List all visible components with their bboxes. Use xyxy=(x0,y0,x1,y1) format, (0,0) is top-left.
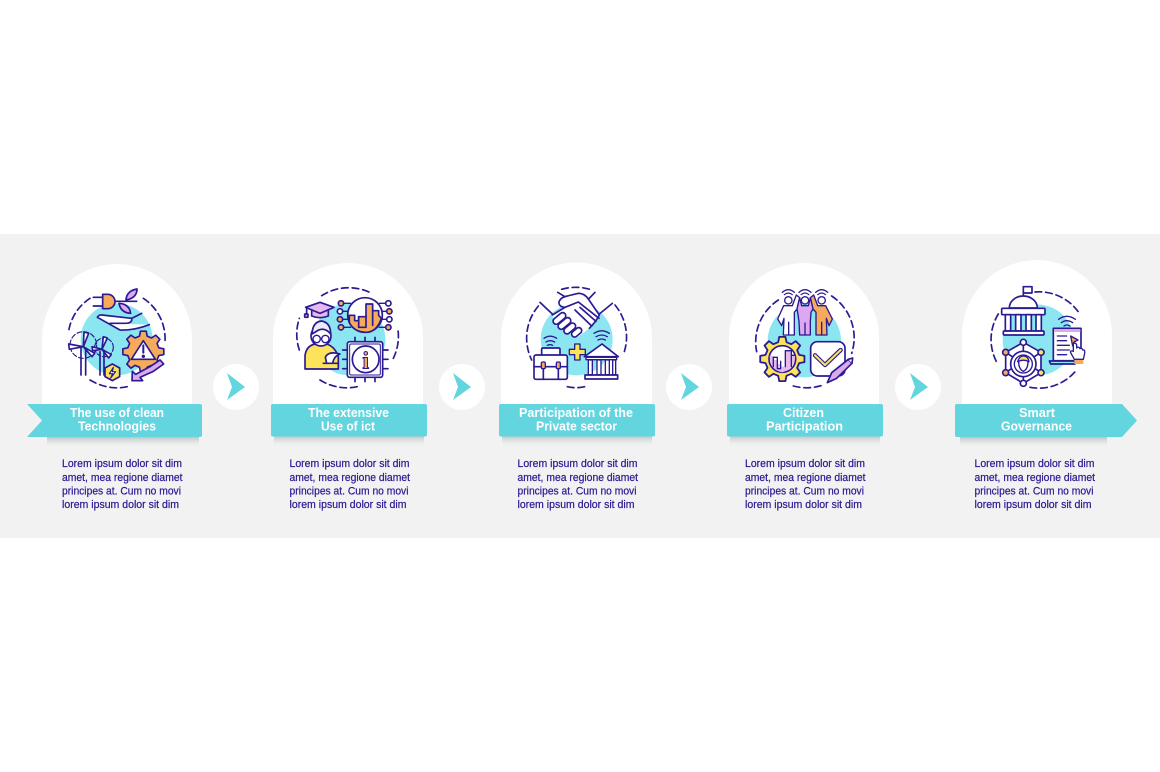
body text xyxy=(62,458,182,511)
body text: Lorem ipsum dolor sit dim xyxy=(62,458,182,470)
body text: lorem ipsum dolor sit dim xyxy=(974,499,1092,511)
body text xyxy=(745,458,866,511)
ribbon shadow xyxy=(47,437,199,448)
heading: The extensive xyxy=(308,406,389,420)
body text: lorem ipsum dolor sit dim xyxy=(290,499,406,511)
ribbon shadow xyxy=(730,436,880,447)
icon: citizens xyxy=(756,290,854,388)
body text: Lorem ipsum dolor sit dim xyxy=(745,458,865,470)
body text: amet, mea regione diamet xyxy=(745,472,866,484)
step 1: clean technologies xyxy=(27,264,202,511)
ribbon xyxy=(27,404,202,437)
body text: principes at. Cum no movi xyxy=(290,486,408,498)
ribbon shadow xyxy=(960,437,1107,448)
heading: Participation of the xyxy=(519,406,633,420)
body text: lorem ipsum dolor sit dim xyxy=(62,499,179,511)
arch panel xyxy=(42,264,192,404)
icon: ICT: i xyxy=(362,348,369,374)
body text: amet, mea regione diamet xyxy=(518,472,638,484)
heading: Participation xyxy=(766,420,843,434)
step 5: smart governance xyxy=(955,260,1137,511)
body text xyxy=(974,458,1095,511)
body text: principes at. Cum no movi xyxy=(974,486,1094,498)
body text: amet, mea regione diamet xyxy=(974,472,1095,484)
arch panel xyxy=(962,260,1112,404)
icon: ICT xyxy=(297,288,398,388)
heading: Smart xyxy=(1019,406,1056,420)
ribbon xyxy=(727,404,883,436)
heading: Governance xyxy=(1001,420,1072,434)
body text: amet, mea regione diamet xyxy=(62,472,182,484)
step 4: citizen participation xyxy=(727,263,883,511)
heading xyxy=(766,406,843,434)
body text: lorem ipsum dolor sit dim xyxy=(745,499,862,511)
body text xyxy=(518,458,638,511)
arrow 4 xyxy=(895,364,941,410)
heading: Citizen xyxy=(783,406,824,420)
body text: amet, mea regione diamet xyxy=(290,472,410,484)
step 2: ICT xyxy=(271,263,427,511)
heading: Use of ict xyxy=(321,420,376,434)
heading xyxy=(308,406,389,434)
body text: principes at. Cum no movi xyxy=(518,486,636,498)
heading xyxy=(70,406,164,434)
icon: governance xyxy=(991,287,1085,388)
icon: clean technology xyxy=(68,289,165,388)
heading: Private sector xyxy=(536,420,617,434)
ribbon shadow xyxy=(502,436,652,447)
ribbon xyxy=(955,404,1137,437)
ribbon shadow xyxy=(274,436,424,447)
body text: Lorem ipsum dolor sit dim xyxy=(290,458,410,470)
background band xyxy=(0,234,1160,538)
arch panel xyxy=(501,263,652,404)
heading xyxy=(1001,406,1072,434)
heading: The use of clean xyxy=(70,406,164,420)
body text: Lorem ipsum dolor sit dim xyxy=(974,458,1094,470)
arrow 2 xyxy=(439,364,485,410)
arrow 1 xyxy=(213,364,259,410)
body text xyxy=(290,458,410,511)
body text: lorem ipsum dolor sit dim xyxy=(518,499,634,511)
body text: principes at. Cum no movi xyxy=(745,486,864,498)
body text: Lorem ipsum dolor sit dim xyxy=(518,458,638,470)
icon: partnership xyxy=(527,287,627,388)
ribbon xyxy=(499,404,655,436)
step 3: private sector xyxy=(499,263,655,511)
arch panel xyxy=(729,263,879,404)
ribbon xyxy=(271,404,427,436)
arch panel xyxy=(273,263,423,404)
body text: principes at. Cum no movi xyxy=(62,486,181,498)
heading xyxy=(519,406,633,434)
arrow 3 xyxy=(666,364,712,410)
heading: Technologies xyxy=(78,420,156,434)
